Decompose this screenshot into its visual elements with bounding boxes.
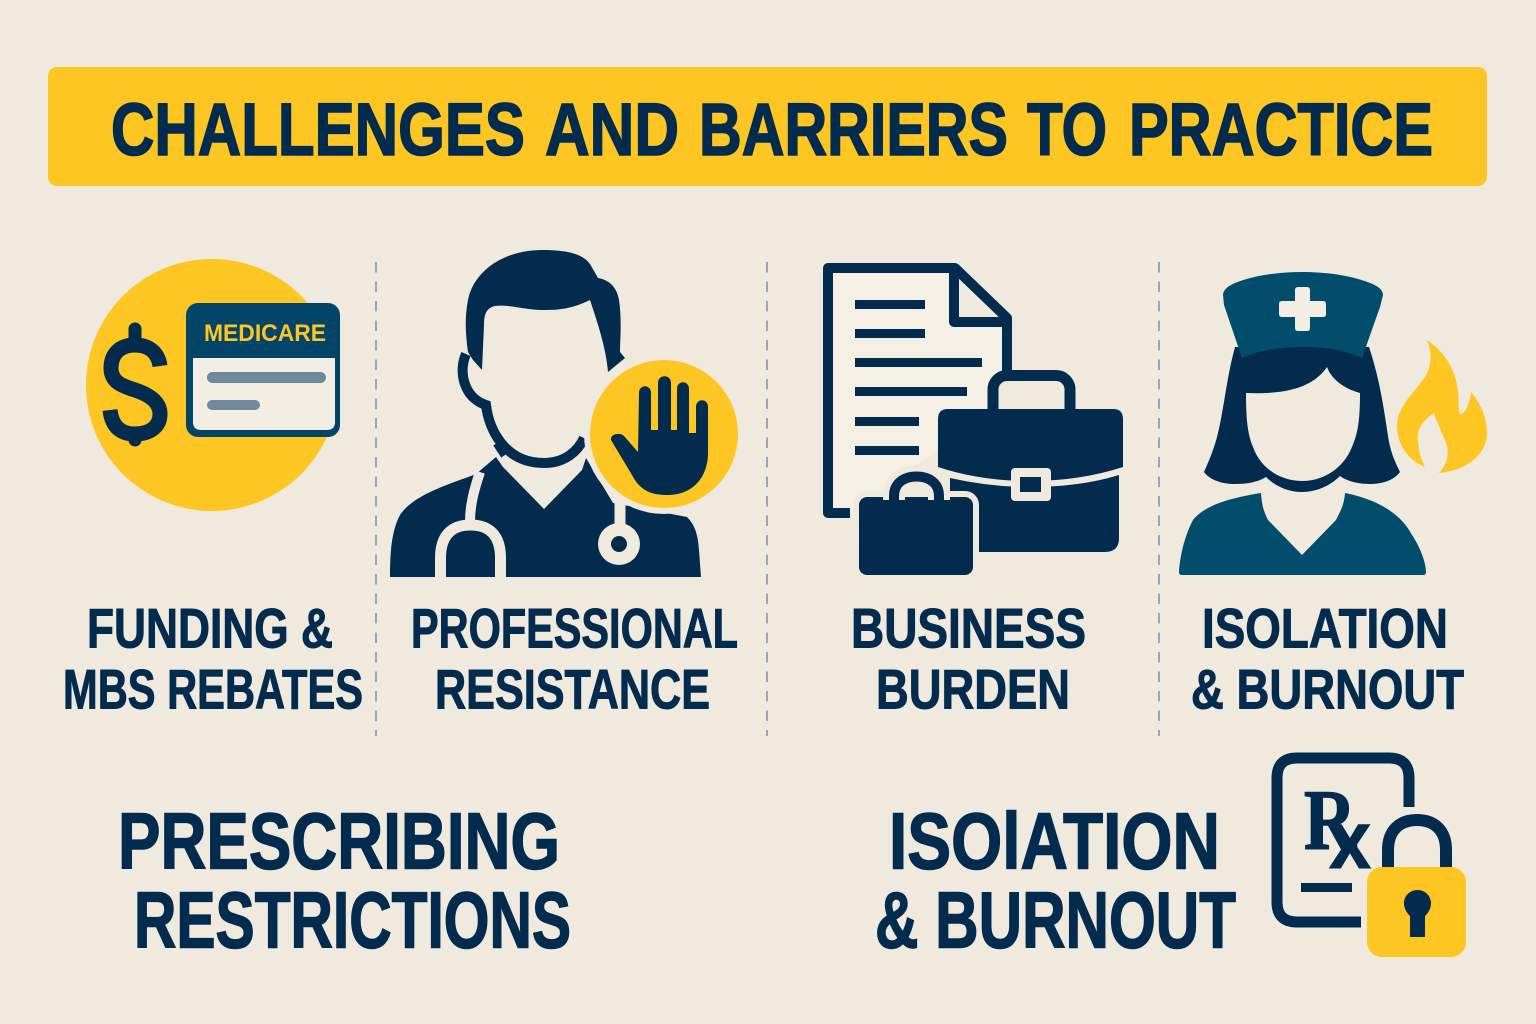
label: prescribing restrictions: RESTRICTIONS [134, 876, 571, 964]
icon: funding and Medicare card: MEDICARE [204, 320, 326, 347]
title banner: TO [1027, 88, 1107, 171]
label: prescribing restrictions [118, 796, 571, 964]
label: business burden: BUSINESS [851, 596, 1086, 660]
label: isolation and burnout, lower row [875, 796, 1236, 964]
label: business burden [851, 596, 1086, 720]
icon: doctor with stop hand [390, 250, 744, 577]
title banner: BARRIERS [699, 88, 1008, 171]
icon: locked prescription: R [1304, 772, 1357, 868]
title banner: PRACTICE [1129, 88, 1433, 171]
icon: paperwork and briefcases [828, 268, 1123, 575]
label: funding and MBS rebates [63, 596, 363, 720]
label: professional resistance [411, 596, 738, 720]
title banner: CHALLENGES [111, 88, 525, 171]
label: funding and MBS rebates: MBS REBATES [63, 658, 363, 720]
label: isolation and burnout, lower row: ISOlATION [889, 796, 1220, 886]
label: funding and MBS rebates: FUNDING & [87, 596, 333, 660]
label: isolation and burnout [1191, 596, 1464, 720]
label: professional resistance: RESISTANCE [435, 658, 710, 720]
label: prescribing restrictions: PRESCRIBING [118, 796, 560, 886]
label: professional resistance: PROFESSIONAL [411, 596, 738, 660]
icon: funding and Medicare card [86, 259, 340, 511]
label: business burden: BURDEN [876, 658, 1070, 720]
icon: nurse with flame [1179, 272, 1487, 575]
label: isolation and burnout: ISOLATION [1202, 596, 1448, 660]
label: isolation and burnout: & BURNOUT [1191, 658, 1464, 720]
icon: locked prescription: x [1329, 795, 1371, 886]
icon: locked prescription [1277, 758, 1466, 957]
label: isolation and burnout, lower row: & BURNOUT [875, 876, 1236, 964]
title banner: AND [545, 88, 679, 171]
title banner [48, 67, 1487, 186]
